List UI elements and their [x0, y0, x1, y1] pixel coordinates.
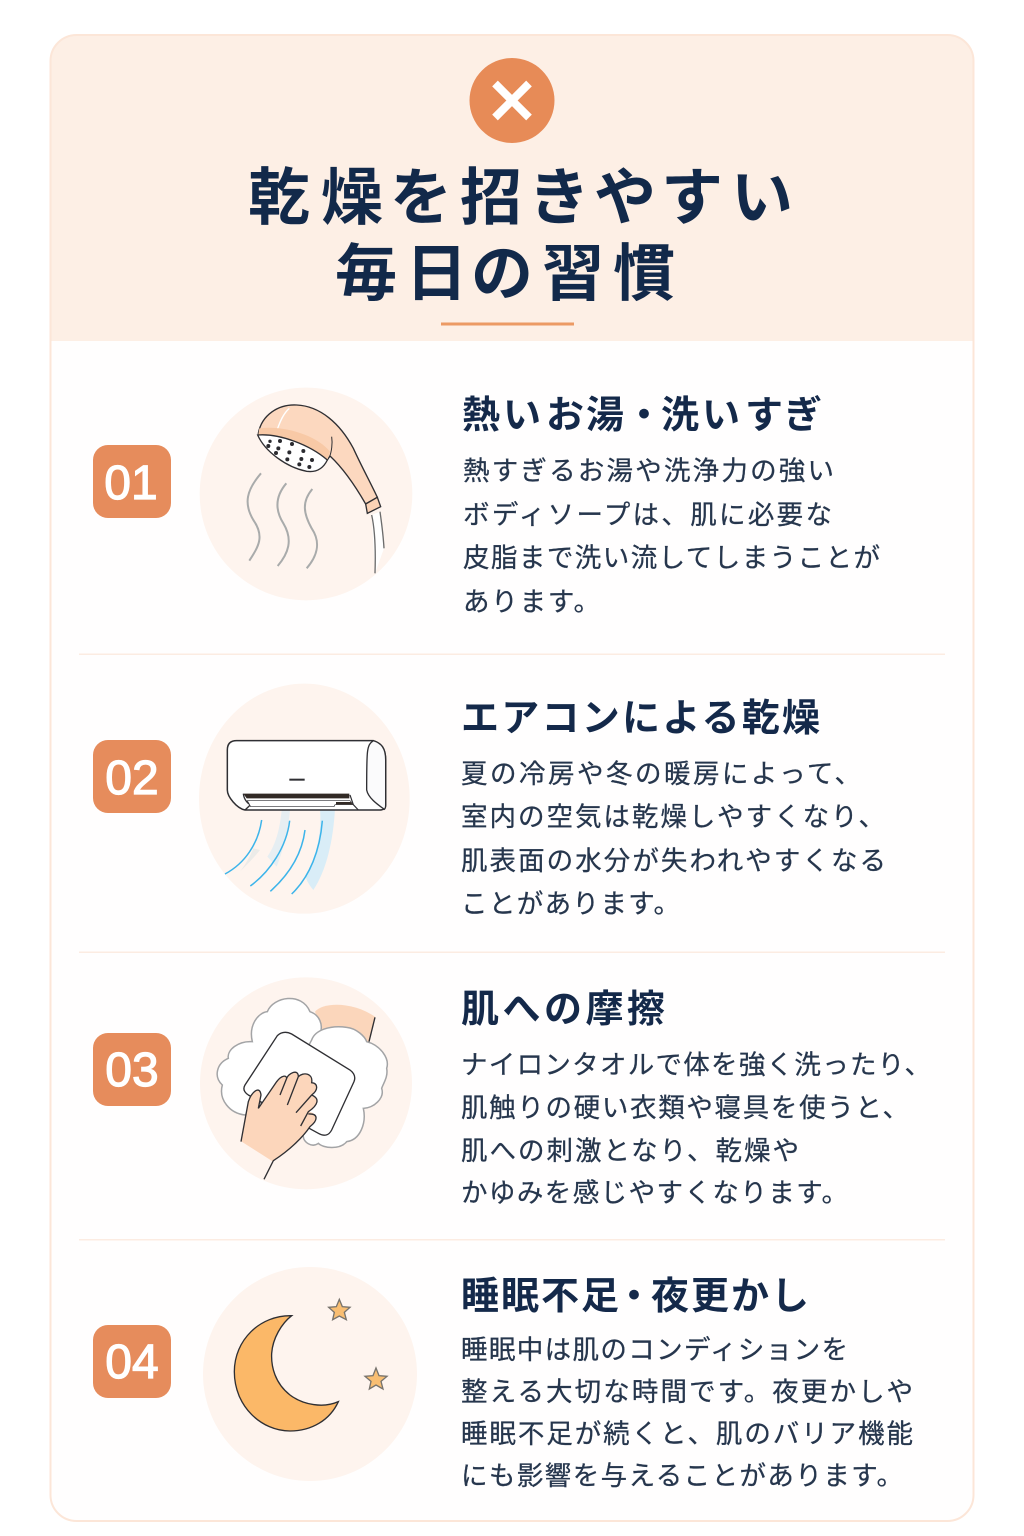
text 04 — [461, 1335, 913, 1491]
icon: moon and stars — [203, 1267, 417, 1481]
text 04: にも影響を与えることがあります。 — [461, 1461, 903, 1491]
text 03: 肌触りの硬い衣類や寝具を使うと、 — [461, 1093, 909, 1123]
text 03: ナイロンタオルで体を強く洗ったり、 — [461, 1050, 931, 1080]
title underline — [441, 322, 574, 326]
heading 01: 熱いお湯・洗いすぎ — [462, 395, 822, 437]
title: 乾燥を招きやすい — [248, 164, 793, 233]
heading 02: エアコンによる乾燥 — [461, 698, 820, 740]
icon: x mark — [470, 58, 554, 143]
badge 03 — [93, 1033, 171, 1106]
text 02: 肌表面の水分が失われやすくなる — [461, 846, 886, 876]
badge 02 — [93, 740, 171, 813]
heading 04: 睡眠不足・夜更かし — [461, 1276, 809, 1318]
badge 01: 01 — [104, 457, 158, 510]
text 02: 夏の冷房や冬の暖房によって、 — [461, 759, 861, 789]
text 02: 室内の空気は乾燥しやすくなり、 — [461, 802, 885, 832]
icon: air conditioner — [199, 684, 410, 914]
icon: towel and hand — [200, 977, 412, 1189]
text 04: 整える大切な時間です。夜更かしや — [461, 1377, 913, 1407]
badge 04: 04 — [105, 1336, 159, 1389]
text 03: 肌への刺激となり、乾燥や — [461, 1136, 799, 1166]
badge 04 — [93, 1325, 171, 1398]
panel: item 03 — [93, 977, 931, 1208]
heading 03: 肌への摩擦 — [461, 989, 665, 1031]
badge 02: 02 — [105, 752, 159, 805]
text 01: 皮脂まで洗い流してしまうことが — [463, 543, 880, 573]
icon: shower head — [200, 388, 412, 600]
badge 03: 03 — [105, 1044, 159, 1097]
text 01: ボディソープは、肌に必要な — [463, 500, 832, 530]
text 03 — [461, 1050, 931, 1208]
header band — [50, 35, 974, 341]
title — [248, 164, 793, 309]
text 02 — [461, 759, 886, 919]
badge 01 — [93, 445, 171, 518]
title: 毎日の習慣 — [335, 240, 675, 309]
text 04: 睡眠不足が続くと、肌のバリア機能 — [461, 1419, 913, 1449]
text 02: ことがあります。 — [461, 889, 680, 919]
text 03: かゆみを感じやすくなります。 — [461, 1178, 848, 1208]
panel: item 04 — [93, 1267, 913, 1491]
text 01: あります。 — [463, 587, 600, 617]
panel: item 01 — [93, 388, 880, 617]
text 04: 睡眠中は肌のコンディションを — [461, 1335, 848, 1365]
text 01: 熱すぎるお湯や洗浄力の強い — [463, 456, 834, 486]
text 01 — [463, 456, 880, 617]
panel: item 02 — [93, 684, 886, 919]
